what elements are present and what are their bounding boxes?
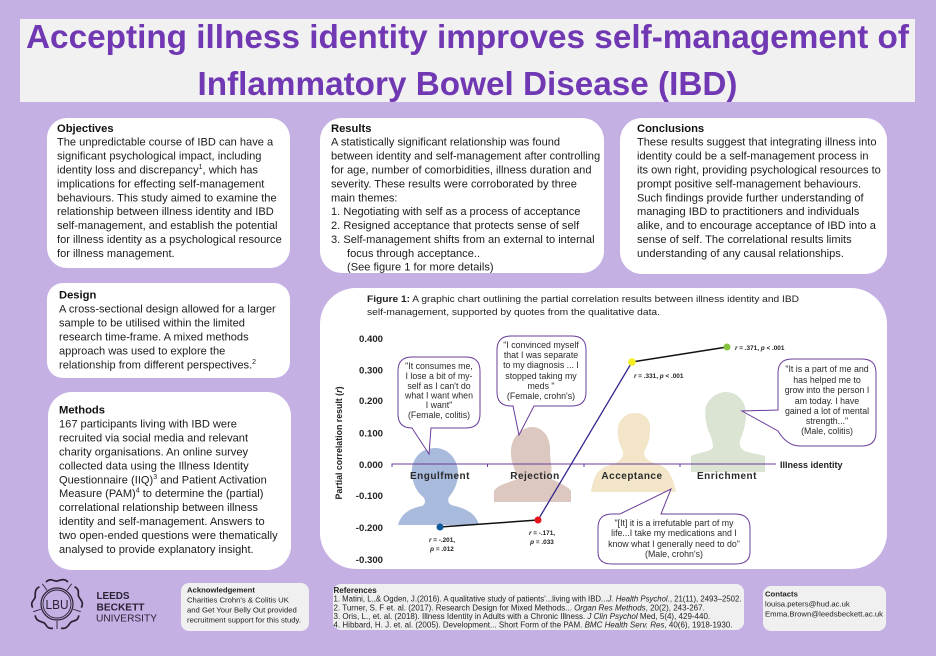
speech bubble: acceptance quote: life...I take my medications and I xyxy=(611,528,737,538)
x axis title: Illness identity xyxy=(780,460,843,470)
speech bubble: enrichment quote: "It is a part of me and xyxy=(785,364,869,374)
panel: objectives: relationship between illness identity and IBD xyxy=(57,206,274,218)
panel: methods: identity and self-management. Answers to xyxy=(59,516,265,528)
panel: design xyxy=(47,283,290,378)
panel: figure 1 chart xyxy=(320,288,887,569)
panel: design: 2 xyxy=(252,359,256,366)
speech bubble: engulfment quote: I lose a bit of my- xyxy=(406,371,473,381)
speech bubble: rejection quote: to my diagnosis ... I xyxy=(503,360,579,370)
title: Inflammatory Bowel Disease (IBD) xyxy=(198,65,738,102)
speech bubble: enrichment quote: (Male, colitis) xyxy=(801,426,853,436)
y axis labels: 0.400 xyxy=(359,334,383,345)
panel: results: 2. Resigned acceptance that protects sense of self xyxy=(331,220,580,232)
panel: methods: 167 participants living with IBD were xyxy=(59,419,237,431)
speech bubble: engulfment quote: "It consumes me, xyxy=(405,361,473,371)
panel: contacts: Contacts xyxy=(765,590,798,598)
panel: results xyxy=(320,118,604,274)
panel: acknowledgement: Acknowledgement xyxy=(187,586,255,594)
logo: Leeds Beckett University xyxy=(30,580,157,630)
stat labels: r = .371, p < .001 xyxy=(735,345,785,352)
panel: objectives: for illness management. xyxy=(57,248,175,260)
panel: conclusions: managing IBD to practitioners and individuals xyxy=(637,206,860,218)
panel: design: A cross-sectional design allowed for a larger xyxy=(59,304,276,316)
panel: methods xyxy=(48,392,291,570)
data points xyxy=(436,344,730,530)
panel: objectives xyxy=(47,118,290,268)
category labels xyxy=(410,471,757,482)
speech bubble: engulfment quote: what I want when xyxy=(404,390,473,400)
figure caption: Figure 1: A graphic chart outlining the partial correlation results between illness identity and IBD xyxy=(367,293,799,304)
panel: contacts: louisa.peters@hud.ac.uk xyxy=(765,600,850,608)
speech bubble: engulfment quote: (Female, colitis) xyxy=(408,410,470,420)
panel: conclusions: sense of self. The correlational results limits xyxy=(637,234,852,246)
y axis labels: 0.100 xyxy=(359,428,383,440)
stat labels xyxy=(429,345,785,553)
stat labels: p = .033 xyxy=(529,539,554,546)
silhouette: rejection xyxy=(494,427,571,502)
logo: Leeds Beckett University: BECKETT xyxy=(96,602,144,614)
category labels: Engulfment xyxy=(410,471,470,482)
y axis labels xyxy=(356,334,383,566)
logo: Leeds Beckett University: UNIVERSITY xyxy=(96,614,157,624)
panel: contacts: Emma.Brown@leedsbeckett.ac.uk xyxy=(765,610,883,618)
speech bubble: engulfment quote xyxy=(398,357,480,454)
panel: methods: Measure (PAM) xyxy=(59,488,136,500)
x axis xyxy=(392,464,776,467)
panel: methods: analysed to provide explanatory insight. xyxy=(59,544,254,556)
title: Accepting illness identity improves self-management of xyxy=(26,18,910,55)
speech bubble: acceptance quote: know what I generally need to do" xyxy=(608,539,740,549)
speech bubble: rejection quote: (Female, crohn's) xyxy=(507,391,575,401)
panel: results: Results xyxy=(331,123,371,135)
speech bubble: acceptance quote xyxy=(598,489,750,564)
panel: contacts xyxy=(763,586,886,631)
panel: objectives: The unpredictable course of IBD can have a xyxy=(57,137,274,149)
panel: conclusions: Such findings provide further understanding of xyxy=(637,192,865,204)
speech bubble: rejection quote: stopped taking my xyxy=(505,371,577,381)
panel: objectives: , which has xyxy=(203,164,258,176)
panel: results: focus through acceptance.. xyxy=(347,248,480,260)
panel: references: 4. Hibbard, H. J. et. al. (2005). Development... Short Form of the PAM. BMC Health Serv. Res, 40(6), 1918-1930. xyxy=(334,620,732,630)
speech bubble: enrichment quote: strength..." xyxy=(806,416,848,426)
stat labels: p = .012 xyxy=(429,546,454,553)
panel: methods: 4 xyxy=(136,488,140,495)
silhouette: enrichment xyxy=(691,392,765,472)
silhouette: engulfment xyxy=(398,448,479,525)
panel: acknowledgement: and Get Your Belly Out provided xyxy=(187,606,297,614)
speech bubble: enrichment quote: am today. I have xyxy=(795,396,859,406)
panel: acknowledgement: Charities Crohn's & Colitis UK xyxy=(187,596,290,604)
panel: acknowledgement: recruitment support for this study. xyxy=(187,616,301,624)
panel: methods: correlational relationship between illness xyxy=(59,502,258,514)
icon: rose emblem: LBU xyxy=(46,597,68,612)
panel: references: 2. Turner, S. F et. al. (2017). Research Design for Mixed Methods... Organ Res Methods, 20(2), 243-267. xyxy=(334,604,705,612)
panel: methods: 3 xyxy=(153,474,157,481)
panel: design: research time-frame. A mixed methods xyxy=(59,332,249,344)
panel: design: approach was used to explore the xyxy=(59,346,225,358)
speech bubble: engulfment quote: I want" xyxy=(426,400,452,410)
y axis labels: 0.200 xyxy=(359,396,383,407)
panel: references: References xyxy=(334,586,377,595)
speech bubble: rejection quote xyxy=(497,336,586,435)
panel: design: relationship from different perspectives. xyxy=(59,360,252,372)
speech bubble: engulfment quote: self as I can't do xyxy=(407,381,471,391)
logo: Leeds Beckett University: LEEDS xyxy=(96,591,130,602)
speech bubble: acceptance quote: "[It] it is a irrefutable part of my xyxy=(614,518,734,528)
y axis labels: -0.300 xyxy=(356,555,383,566)
stat labels: r = -.201, xyxy=(429,537,455,544)
panel: objectives: identity loss and discrepancy xyxy=(57,164,199,176)
panel: conclusions: understanding of any causal relationships. xyxy=(637,248,844,260)
correlation line xyxy=(440,347,727,527)
panel: methods: Questionnaire (IIQ) xyxy=(59,474,153,486)
panel: references: 3. Oris, L., et. al. (2018). Illness Identity in Adults with a Chronic Illness. J Clin Psychol Med, 5(4), 429-440. xyxy=(334,612,710,621)
category labels: Rejection xyxy=(510,471,560,482)
panel: methods: recruited via social media and relevant xyxy=(59,433,248,445)
title xyxy=(20,18,915,102)
panel: results: main themes: xyxy=(331,192,398,204)
panel: results: A statistically significant relationship was found xyxy=(331,137,560,149)
panel: objectives: implications for effecting self-management xyxy=(57,178,264,190)
panel: conclusions: Conclusions xyxy=(637,123,704,135)
stat labels: r = .331, p < .001 xyxy=(634,373,684,380)
speech bubble: acceptance quote: (Male, crohn's) xyxy=(645,549,703,559)
panel: objectives: self-management, and establish the potential xyxy=(57,220,277,232)
y axis labels: 0.300 xyxy=(359,366,383,376)
figure caption: self-management, supported by quotes from the qualitative data. xyxy=(367,306,660,317)
y axis title: Partial correlation result (r) xyxy=(334,386,344,500)
panel: references xyxy=(333,584,744,630)
panel: objectives: significant psychological impact, including xyxy=(57,151,261,163)
panel: methods: collected data using the Illness Identity xyxy=(59,460,249,472)
panel: conclusions: alike, and to encourage acceptance of IBD into a xyxy=(637,220,877,232)
panel: objectives: 1 xyxy=(199,164,203,171)
panel: references: 1. Matini, L.,& Ogden, J.(2016). A qualitative study of patients'...living with IBD...J. Health Psychol., 21(11), 2493–2502. xyxy=(334,594,742,604)
panel: methods: and Patient Activation xyxy=(157,474,267,486)
speech bubble: enrichment quote: gained a lot of mental xyxy=(785,406,869,416)
figure caption xyxy=(367,293,799,317)
panel: results: 3. Self-management shifts from an external to internal xyxy=(331,234,595,246)
stat labels: r = -.171, xyxy=(529,530,555,537)
speech bubble: rejection quote: meds " xyxy=(527,381,555,391)
speech bubble: rejection quote: "I convinced myself xyxy=(503,340,579,350)
panel: methods: Methods xyxy=(59,405,105,417)
panel: methods: to determine the (partial) xyxy=(140,488,263,500)
category labels: Acceptance xyxy=(601,471,663,482)
panel: methods: two open-ended questions were thematically xyxy=(59,530,278,542)
silhouette: acceptance xyxy=(591,413,676,492)
panel: results: 1. Negotiating with self as a process of acceptance xyxy=(331,206,580,218)
panel: objectives: behaviours. This study aimed to examine the xyxy=(57,192,277,204)
y axis labels: 0.000 xyxy=(359,460,383,471)
panel: conclusions xyxy=(620,118,887,274)
panel: results: severity. These results were corroborated by three xyxy=(331,178,577,190)
panel: acknowledgement xyxy=(181,583,309,631)
panel: methods: charity organisations. An online survey xyxy=(59,446,249,458)
panel: design: sample to be utilised within the limited xyxy=(59,318,245,330)
panel: conclusions: identity could be a self-management process in xyxy=(637,151,869,163)
panel: objectives: for illness identity as a psychological resource xyxy=(57,234,282,246)
speech bubble: enrichment quote: has helped me to xyxy=(793,375,861,385)
panel: conclusions: prompt positive self-management behaviours. xyxy=(637,178,861,190)
speech bubble: enrichment quote: grow into the person I xyxy=(785,385,869,395)
panel: results: for age, number of comorbidities, illness duration and xyxy=(331,164,591,176)
panel: design: Design xyxy=(59,290,96,302)
y axis labels: -0.200 xyxy=(356,523,383,534)
panel: results: between identity and self-management after controlling xyxy=(331,151,600,163)
panel: results: (See figure 1 for more details) xyxy=(347,262,494,274)
y axis labels: -0.100 xyxy=(356,491,383,502)
speech bubble: enrichment quote xyxy=(742,359,876,446)
panel: objectives: Objectives xyxy=(57,123,114,135)
category labels: Enrichment xyxy=(697,471,757,482)
panel: conclusions: its own right, providing psychological resources to xyxy=(637,164,881,176)
speech bubble: rejection quote: that I was separate xyxy=(504,350,578,360)
panel: conclusions: These results suggest that integrating illness into xyxy=(637,137,877,149)
